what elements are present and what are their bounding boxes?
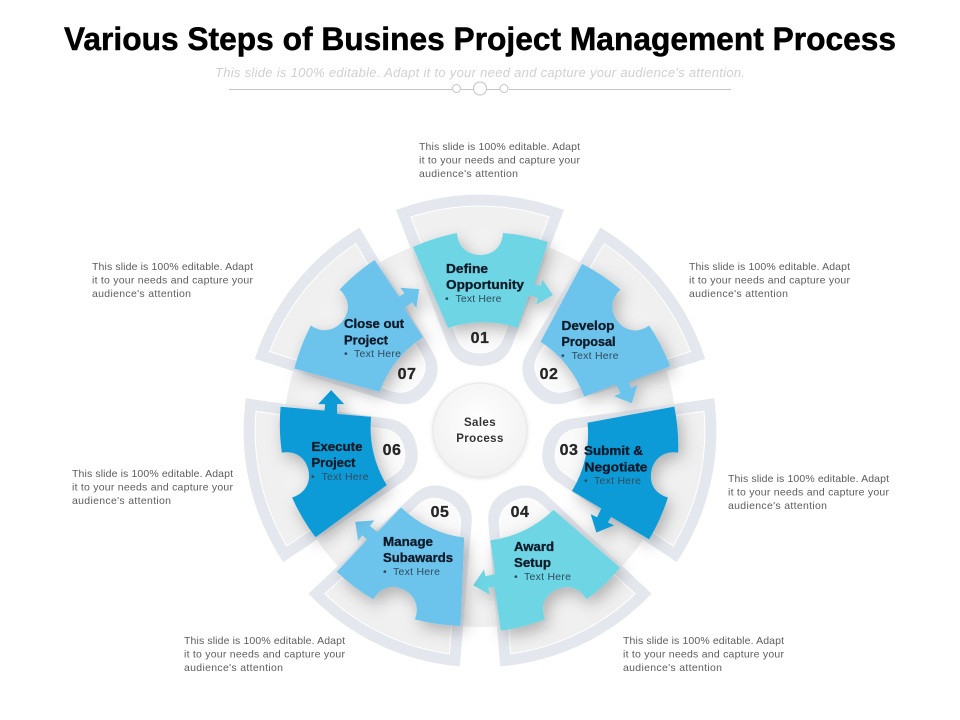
description: step 07: audience's attention [92, 288, 191, 300]
step 06 label: Text Here [322, 471, 369, 483]
step 06 label: 06 [383, 442, 401, 459]
step 02 label [540, 319, 619, 383]
description: step 05: audience's attention [184, 662, 283, 674]
subtitle: This slide is 100% editable. Adapt it to your need and capture your audience's attention. [215, 65, 745, 80]
step 03 label: • [584, 475, 588, 487]
step 02 label: Proposal [562, 335, 616, 349]
puzzle piece 02 [519, 255, 680, 424]
description: step 04 [623, 635, 784, 674]
title: Various Steps of Busines Project Management Process [64, 21, 896, 57]
step 07 label: • [344, 348, 348, 360]
step 01 label: • [445, 293, 449, 305]
step 04 label: Text Here [524, 571, 571, 583]
description: step 03 [728, 473, 890, 512]
puzzle piece 05 [328, 492, 496, 638]
description: step 05 [184, 635, 346, 674]
step 01 label [445, 262, 524, 347]
step 03 label: Text Here [594, 475, 641, 487]
description: step 03: audience's attention [728, 500, 827, 512]
description: step 05: This slide is 100% editable. Adapt [184, 635, 345, 647]
description: step 04: This slide is 100% editable. Adapt [623, 635, 784, 647]
step 05 label: Subawards [383, 551, 453, 565]
description: step 01: This slide is 100% editable. Adapt [419, 141, 580, 153]
puzzle piece 07 [283, 250, 445, 419]
step 06 label: Execute [312, 440, 363, 454]
description: step 03: This slide is 100% editable. Adapt [728, 473, 889, 485]
description: step 06: This slide is 100% editable. Adapt [72, 468, 233, 480]
description: step 02: This slide is 100% editable. Adapt [689, 261, 850, 273]
step 05 label: 05 [431, 504, 449, 521]
step 07 label [344, 317, 416, 383]
step 06 label [311, 440, 401, 483]
step 06 label: • [311, 471, 315, 483]
subtitle divider with three circles [229, 82, 731, 95]
step 02 label: • [561, 350, 565, 362]
step 07 label: Close out [344, 317, 405, 331]
description: step 01: it to your needs and capture your [419, 154, 580, 166]
description: step 07 [92, 261, 254, 300]
step 04 label: • [514, 571, 518, 583]
description: step 05: it to your needs and capture your [184, 648, 346, 660]
description: step 01 [419, 141, 580, 180]
step 01 label: Text Here [456, 293, 502, 305]
step 02 label: 02 [540, 366, 558, 383]
puzzle piece 01 [413, 233, 553, 328]
description: step 01: audience's attention [419, 168, 518, 180]
step 04 label [511, 504, 571, 583]
step 03 label: 03 [560, 442, 578, 459]
step 04 label: Setup [514, 556, 551, 570]
puzzle piece 03 [564, 389, 688, 546]
description: step 07: This slide is 100% editable. Adapt [92, 261, 253, 273]
step 04 label: Award [514, 540, 554, 554]
step 07 label: Text Here [354, 348, 401, 360]
step 04 label: 04 [511, 504, 529, 521]
step 02 label: Text Here [572, 350, 619, 362]
step 01 label: Define [446, 262, 488, 276]
description: step 06 [72, 468, 234, 507]
step 01 label: Opportunity [446, 278, 524, 292]
step 03 label: Negotiate [584, 460, 648, 474]
description: step 03: it to your needs and capture your [728, 486, 890, 498]
puzzle piece 04 [459, 495, 626, 641]
description: step 02: it to your needs and capture your [689, 274, 850, 286]
background disc [284, 235, 676, 627]
central hub: Process [456, 433, 504, 445]
step 05 label: Text Here [393, 566, 440, 578]
central hub [433, 383, 527, 477]
step 06 label: Project [312, 456, 356, 470]
step 02 label: Develop [562, 319, 615, 333]
step 05 label: Manage [383, 535, 433, 549]
segment frames [231, 195, 729, 680]
description: step 04: audience's attention [623, 662, 722, 674]
step 05 label: • [383, 566, 387, 578]
puzzle piece 06 [271, 383, 394, 540]
step 03 label [560, 442, 648, 487]
description: step 02: audience's attention [689, 288, 788, 300]
step 03 label: Submit & [584, 444, 643, 458]
description: step 06: it to your needs and capture your [72, 482, 234, 494]
central hub: Sales [464, 417, 496, 429]
step 07 label: Project [344, 334, 389, 348]
description: step 07: it to your needs and capture your [92, 274, 254, 286]
description: step 02 [689, 261, 850, 300]
step 05 label [383, 504, 453, 578]
step 01 label: 01 [471, 330, 489, 347]
description: step 06: audience's attention [72, 495, 171, 507]
description: step 04: it to your needs and capture your [623, 648, 784, 660]
step 07 label: 07 [398, 366, 416, 383]
